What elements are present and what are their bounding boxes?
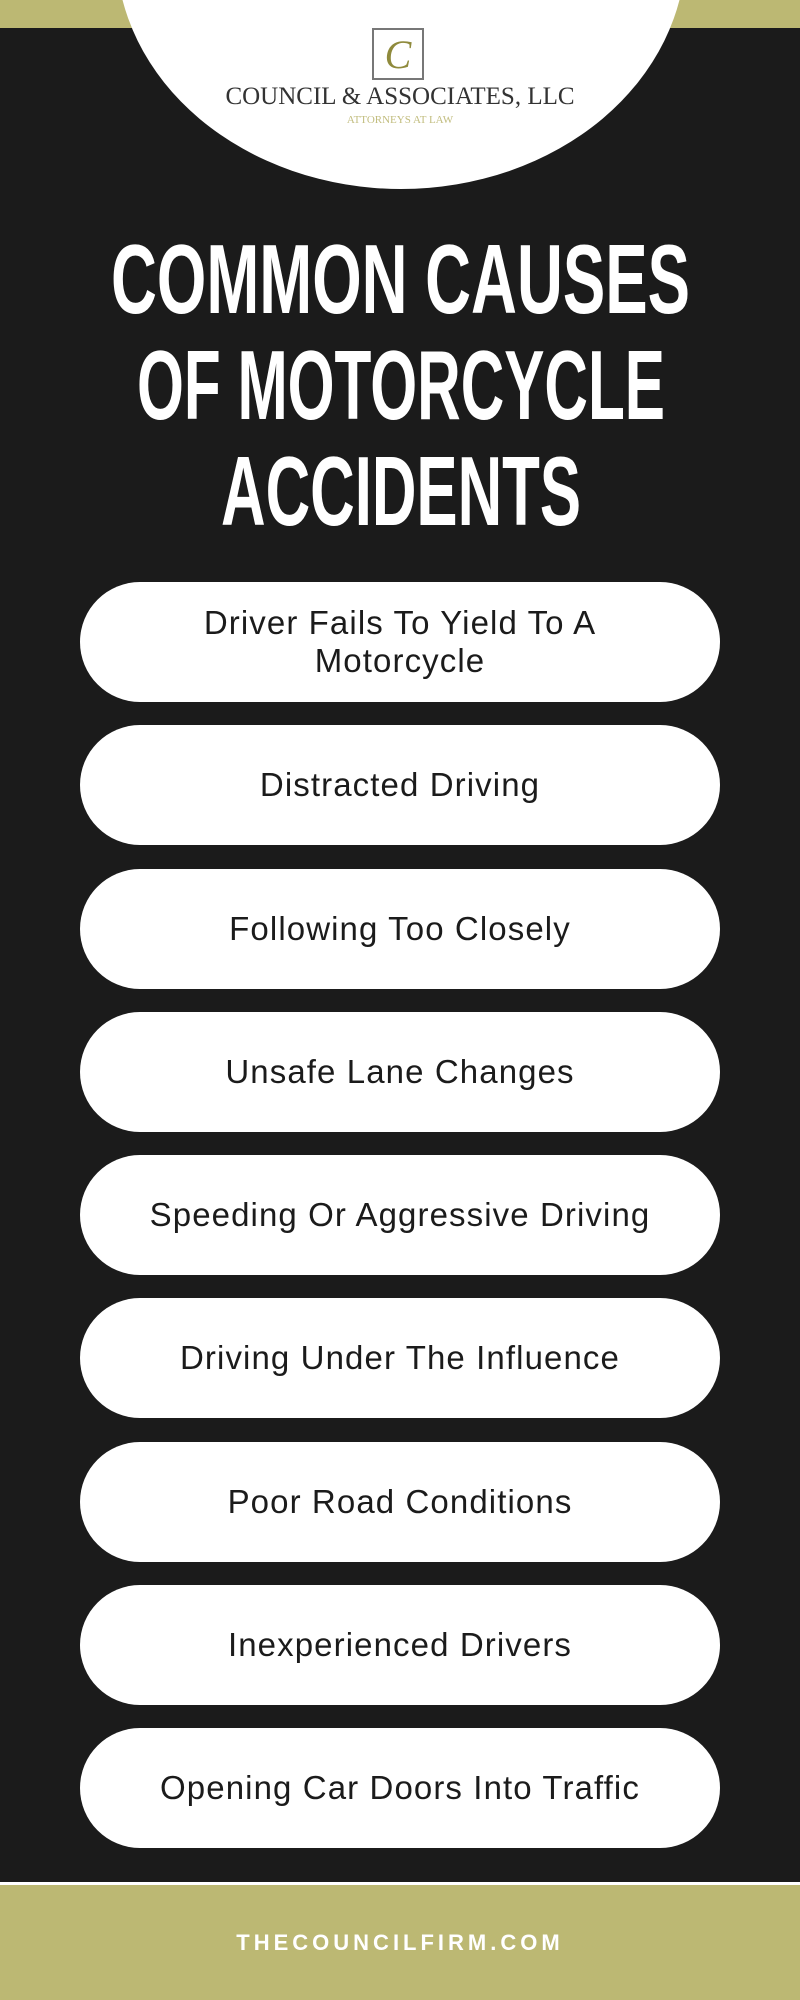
pill: yield: [80, 582, 720, 702]
icon: logo monogram box: [372, 28, 424, 80]
pill: car doors: [80, 1728, 720, 1848]
pill: inexperienced: [80, 1585, 720, 1705]
pill: speeding: [80, 1155, 720, 1275]
pill: lane changes: [80, 1012, 720, 1132]
pill: inexperienced: Inexperienced Drivers: [228, 1626, 572, 1663]
pill: following: [80, 869, 720, 989]
tagline: ATTORNEYS AT LAW: [347, 114, 453, 126]
pill: car doors: Opening Car Doors Into Traffic: [160, 1769, 640, 1806]
pill: yield: Driver Fails To Yield To A: [204, 604, 596, 641]
title: [111, 224, 690, 538]
logo: [225, 28, 575, 126]
pill: yield: Motorcycle: [315, 642, 485, 679]
pill: distracted: Distracted Driving: [260, 766, 540, 803]
pill: following: Following Too Closely: [229, 910, 571, 947]
footer: [0, 1882, 800, 2000]
company name: COUNCIL & ASSOCIATES, LLC: [225, 83, 575, 110]
pill: road conditions: Poor Road Conditions: [228, 1483, 572, 1520]
icon: logo monogram box: C: [385, 32, 411, 76]
pill: lane changes: Unsafe Lane Changes: [225, 1053, 575, 1090]
pill: speeding: Speeding Or Aggressive Driving: [150, 1196, 650, 1233]
pill: road conditions: [80, 1442, 720, 1562]
pill: DUI: [80, 1298, 720, 1418]
pill: DUI: Driving Under The Influence: [180, 1339, 620, 1376]
footer: THECOUNCILFIRM.COM: [236, 1930, 564, 1954]
pill: distracted: [80, 725, 720, 845]
